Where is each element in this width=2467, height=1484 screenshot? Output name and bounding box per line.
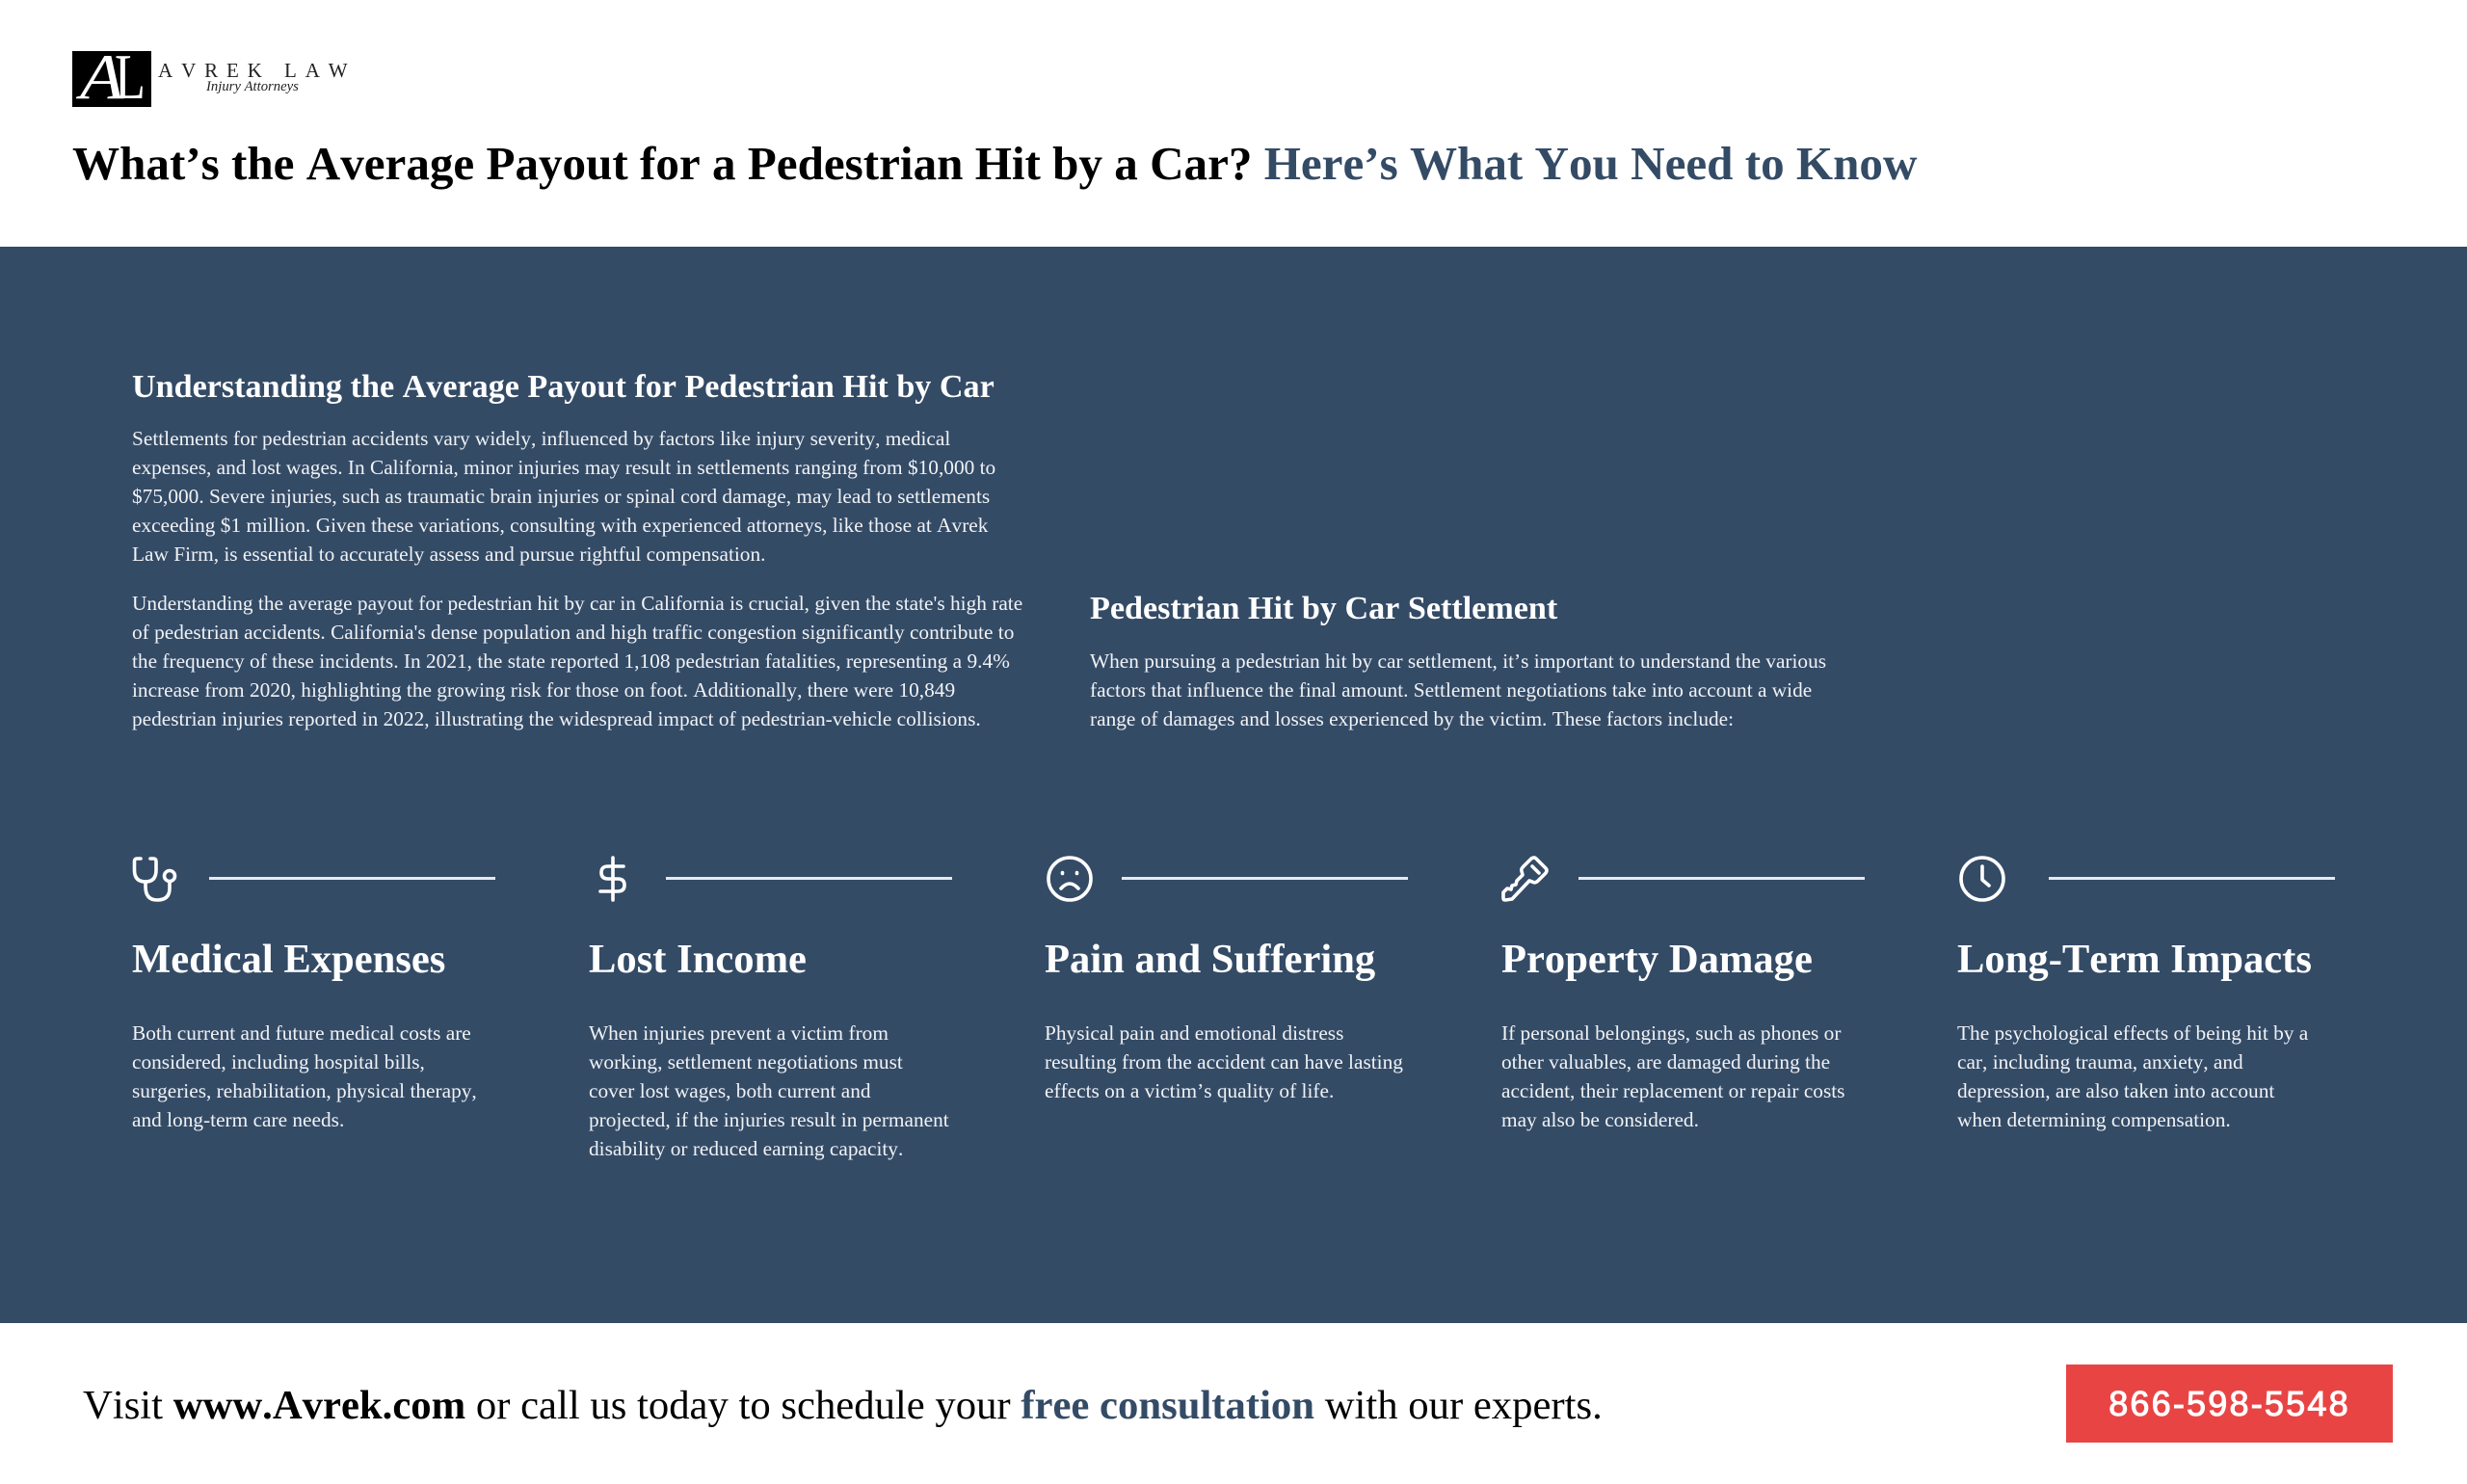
heading: understanding the average payout: Understanding the Average Payout for Pedestrian Hit by Car: [132, 369, 995, 405]
text block: settlement paragraph: When pursuing a pedestrian hit by car settlement, it’s important to understand the various: [1090, 649, 1826, 673]
text block: settlements paragraph: [132, 427, 995, 566]
text block: pain and suffering: Physical pain and emotional distress: [1045, 1021, 1343, 1045]
text block: settlements paragraph: Law Firm, is essential to accurately assess and pursue rightful compensation.: [132, 543, 765, 566]
text block: pain and suffering: resulting from the accident can have lasting: [1045, 1050, 1403, 1073]
text block: long-term impacts: car, including trauma, anxiety, and: [1957, 1050, 2243, 1073]
heading: lost income: Lost Income: [589, 937, 807, 982]
title: What’s the Average Payout for a Pedestrian Hit by a Car? Here’s What You Need to Know: [72, 137, 1917, 190]
logo wordmark: AVREK LAW: [158, 59, 357, 82]
icon: dollar: [598, 856, 626, 902]
text block: medical expenses: and long-term care needs.: [132, 1108, 344, 1131]
call to action text: Visit www.Avrek.com or call us today to schedule your free consultation with our experts.: [83, 1383, 1603, 1428]
text block: settlements paragraph: Settlements for pedestrian accidents vary widely, influenced by factors like injury severity, medical: [132, 427, 950, 450]
text block: pain and suffering: effects on a victim’s quality of life.: [1045, 1079, 1334, 1102]
text block: California paragraph: [132, 592, 1022, 730]
text block: medical expenses: considered, including hospital bills,: [132, 1050, 425, 1073]
text block: settlements paragraph: exceeding $1 million. Given these variations, consulting with experienced attorneys, like those at Avrek: [132, 514, 988, 537]
heading: settlement: Pedestrian Hit by Car Settlement: [1090, 591, 1557, 626]
heading: pain and suffering: Pain and Suffering: [1045, 937, 1375, 982]
text block: property damage: [1501, 1021, 1844, 1131]
text block: settlement paragraph: factors that influence the final amount. Settlement negotiations take into account a wide: [1090, 678, 1812, 702]
text block: settlements paragraph: $75,000. Severe injuries, such as traumatic brain injuries or spinal cord damage, may lead to settlements: [132, 485, 990, 508]
text block: medical expenses: [132, 1021, 477, 1131]
icon: clock: [1959, 856, 2005, 902]
text block: long-term impacts: when determining compensation.: [1957, 1108, 2231, 1131]
text block: settlement paragraph: range of damages and losses experienced by the victim. These factors include:: [1090, 707, 1734, 730]
panel: main content: [0, 247, 2467, 1323]
text block: lost income: disability or reduced earning capacity.: [589, 1137, 903, 1160]
text block: California paragraph: the frequency of these incidents. In 2021, the state reported 1,108 pedestrian fatalities, representing a 9.4%: [132, 649, 1010, 673]
text block: property damage: accident, their replacement or repair costs: [1501, 1079, 1844, 1102]
text block: California paragraph: Understanding the average payout for pedestrian hit by car in California is crucial, given the state's high rate: [132, 592, 1022, 615]
text block: medical expenses: Both current and future medical costs are: [132, 1021, 471, 1045]
phone button: [2066, 1365, 2393, 1443]
heading: long-term impacts: Long-Term Impacts: [1957, 937, 2312, 982]
text block: long-term impacts: depression, are also taken into account: [1957, 1079, 2274, 1102]
phone button: 866-598-5548: [2109, 1384, 2350, 1423]
text block: California paragraph: pedestrian injuries reported in 2022, illustrating the widespread impact of pedestrian-vehicle collisions.: [132, 707, 981, 730]
text block: California paragraph: of pedestrian accidents. California's dense population and high traffic congestion significantly contribute to: [132, 621, 1014, 644]
text block: long-term impacts: [1957, 1021, 2308, 1131]
heading: medical expenses: Medical Expenses: [132, 937, 445, 982]
logo: [72, 51, 357, 107]
text block: settlement paragraph: [1090, 649, 1826, 730]
text block: pain and suffering: [1045, 1021, 1403, 1102]
icon: key: [1501, 856, 1549, 902]
text block: settlements paragraph: expenses, and lost wages. In California, minor injuries may result in settlements ranging from $10,000 to: [132, 456, 995, 479]
text block: lost income: working, settlement negotiations must: [589, 1050, 903, 1073]
text block: lost income: [589, 1021, 949, 1160]
text block: medical expenses: surgeries, rehabilitation, physical therapy,: [132, 1079, 477, 1102]
logo mark: [72, 51, 151, 107]
text block: property damage: If personal belongings, such as phones or: [1501, 1021, 1841, 1045]
icon: sad face: [1047, 856, 1093, 902]
text block: lost income: projected, if the injuries result in permanent: [589, 1108, 949, 1131]
text block: long-term impacts: The psychological effects of being hit by a: [1957, 1021, 2308, 1045]
heading: property damage: Property Damage: [1501, 937, 1813, 982]
text block: property damage: other valuables, are damaged during the: [1501, 1050, 1830, 1073]
text block: lost income: When injuries prevent a victim from: [589, 1021, 889, 1045]
text block: California paragraph: increase from 2020, highlighting the growing risk for those on foot. Additionally, there were 10,849: [132, 678, 955, 702]
text block: property damage: may also be considered.: [1501, 1108, 1699, 1131]
logo tagline: Injury Attorneys: [206, 79, 299, 94]
icon: stethoscope: [133, 857, 177, 902]
text block: lost income: cover lost wages, both current and: [589, 1079, 871, 1102]
